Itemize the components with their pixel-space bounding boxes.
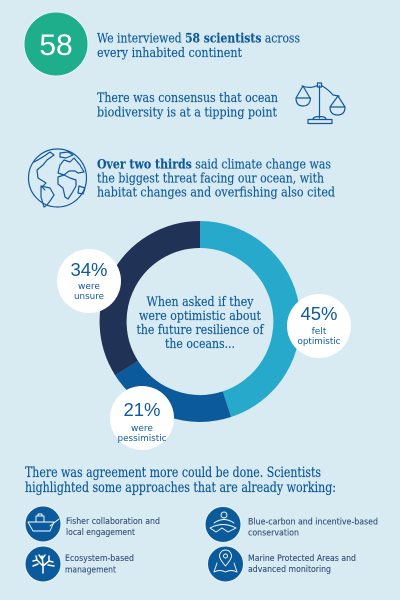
segment: optimistic 45% bbox=[200, 234, 287, 404]
icon: person over landscape bbox=[210, 512, 236, 532]
segment: unsure 34% bbox=[113, 234, 200, 368]
text: interviews: We interviewed 58 scientists across bbox=[97, 32, 300, 46]
callout: 21% pessimistic: pessimistic bbox=[118, 434, 167, 444]
item: blue carbon: Blue-carbon and incentive-based bbox=[248, 518, 378, 528]
icon: boat bbox=[28, 514, 59, 531]
callout: 45% optimistic bbox=[287, 294, 351, 358]
text: climate threat: habitat changes and overfishing also cited bbox=[97, 186, 335, 200]
heading: agreement: There was agreement more could be done. Scientists bbox=[25, 465, 321, 481]
badge: 58 scientists: 58 bbox=[39, 29, 73, 62]
text: climate threat: the biggest threat facing our ocean, with bbox=[97, 172, 324, 186]
item: marine protected areas: Marine Protected Areas and bbox=[248, 554, 356, 564]
callout: 34% unsure: were bbox=[78, 282, 100, 292]
text: consensus bbox=[97, 91, 278, 120]
item: ecosystem management: management bbox=[65, 566, 116, 576]
donut centre text: When asked if they bbox=[146, 295, 254, 310]
item: fisher collaboration bbox=[25, 506, 160, 542]
callout: 34% unsure bbox=[57, 249, 121, 313]
text: consensus: biodiversity is at a tipping point bbox=[97, 106, 278, 120]
item: ecosystem management: Ecosystem-based bbox=[65, 554, 134, 564]
donut centre text: were optimistic about bbox=[139, 309, 262, 324]
callout: 21% pessimistic: were bbox=[131, 424, 153, 434]
callout: 45% optimistic: felt bbox=[312, 327, 327, 337]
text: consensus: There was consensus that ocean bbox=[97, 91, 278, 106]
text: climate threat bbox=[97, 158, 335, 200]
icon: balance scales bbox=[296, 83, 345, 124]
heading: agreement bbox=[25, 465, 336, 496]
text: interviews bbox=[97, 32, 300, 61]
callout: 45% optimistic: optimistic bbox=[298, 337, 341, 347]
donut chart bbox=[113, 234, 287, 408]
text: interviews: every inhabited continent bbox=[97, 46, 243, 61]
icon: globe bbox=[28, 149, 86, 207]
callout: 21% pessimistic: 21% bbox=[123, 399, 161, 420]
item: fisher collaboration: local engagement bbox=[66, 528, 135, 538]
badge: 58 scientists bbox=[24, 12, 88, 76]
icon: coral bbox=[33, 555, 54, 573]
item: blue carbon: conservation bbox=[248, 528, 299, 538]
item: ecosystem management bbox=[25, 546, 134, 582]
item: blue carbon bbox=[205, 506, 378, 542]
item: fisher collaboration: Fisher collaboration and bbox=[66, 517, 160, 527]
donut centre text: the future resilience of bbox=[136, 323, 264, 338]
callout: 34% unsure: unsure bbox=[74, 292, 104, 302]
text: climate threat: Over two thirds said climate change was bbox=[97, 158, 331, 172]
icon: map pin bbox=[214, 550, 237, 572]
item: marine protected areas bbox=[208, 546, 356, 582]
segment: pessimistic 21% bbox=[127, 368, 227, 408]
callout: 21% pessimistic bbox=[110, 386, 174, 450]
callout: 45% optimistic: 45% bbox=[300, 303, 338, 324]
item: marine protected areas: advanced monitoring bbox=[248, 565, 331, 575]
callout: 34% unsure: 34% bbox=[70, 259, 108, 280]
donut centre text bbox=[136, 295, 264, 352]
donut centre text: the oceans... bbox=[165, 337, 235, 352]
